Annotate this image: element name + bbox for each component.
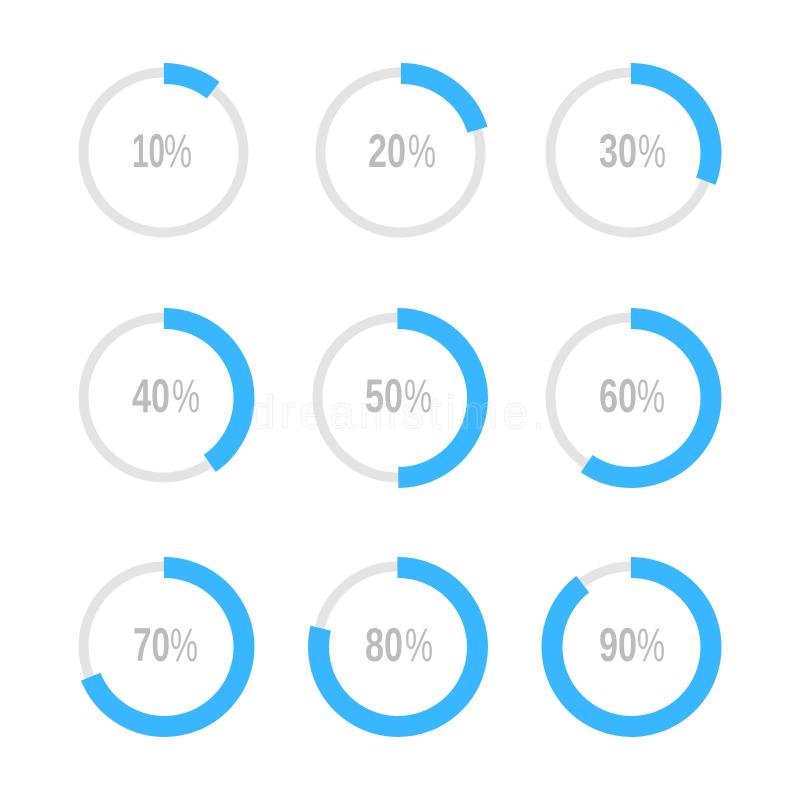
ring: 80% (318, 566, 478, 726)
ring: 20%: 20 (368, 124, 406, 177)
ring: 40% (84, 318, 244, 478)
ring: 40%: % (172, 369, 200, 422)
ring: 40%: 40 (132, 369, 170, 422)
ring: 50%: 50 (365, 369, 403, 422)
ring: 10% (84, 72, 244, 232)
ring: 30%: % (638, 124, 666, 177)
ring: 10%: 10 (132, 124, 165, 177)
ring: 60% (550, 318, 711, 478)
ring: 50%: % (404, 369, 432, 422)
ring: 60%: 60 (599, 369, 637, 422)
ring: 70%: % (170, 618, 198, 671)
ring: 90%: % (637, 618, 665, 671)
ring: 70%: 70 (133, 618, 170, 671)
ring: 70% (84, 566, 244, 726)
ring: 30%: 30 (599, 124, 637, 177)
ring: 60%: % (637, 369, 665, 422)
ring: 80%: % (405, 618, 433, 671)
ring: 10%: % (164, 124, 192, 177)
ring: 30% (550, 72, 711, 232)
ring: 90%: 90 (599, 618, 637, 671)
ring: 20%: % (408, 124, 436, 177)
ring: 80%: 80 (365, 618, 403, 671)
ring: 20% (320, 72, 481, 232)
ring: 90% (550, 566, 711, 726)
ring: 50% (318, 318, 478, 478)
watermark: dreamstime. (250, 386, 545, 438)
